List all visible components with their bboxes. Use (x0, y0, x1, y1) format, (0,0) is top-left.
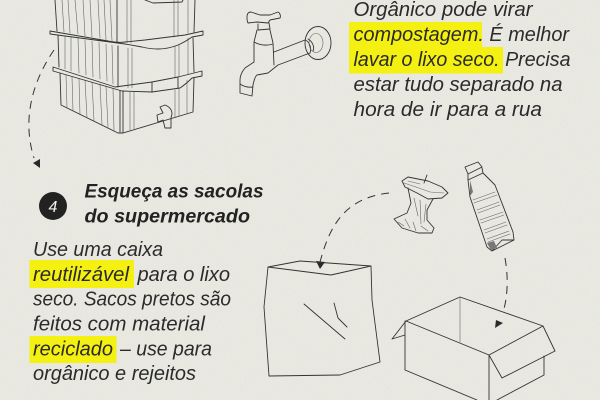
text block: organic and dry waste: estar tudo separado na (354, 74, 562, 96)
text block: organic and dry waste: compostagem. É melhor (354, 23, 570, 46)
icon: open cardboard box (392, 297, 555, 400)
text block: organic and dry waste: lavar o lixo seco. Precisa (354, 49, 570, 71)
icon: water tap (240, 12, 331, 96)
step number badge 4 (39, 192, 67, 220)
step number badge 4: 4 (49, 199, 58, 216)
highlight: reusable and recycled (30, 260, 134, 363)
text block: organic and dry waste (354, 0, 570, 121)
arrow: tank to step 4 (29, 50, 54, 168)
heading: step 4: Esqueça as sacolas (84, 182, 264, 202)
text block: step 4 body: reciclado (33, 338, 113, 360)
text block: step 4 body: orgânico e rejeitos (33, 363, 196, 385)
text block: step 4 body: – use para (119, 338, 212, 360)
text block: organic and dry waste: hora de ir para a rua (354, 99, 542, 121)
text block: step 4 body: para o lixo (136, 264, 230, 286)
heading: step 4 (84, 182, 264, 228)
arrow: bottle to box (495, 258, 507, 328)
text block: step 4 body: seco. Sacos pretos são (33, 288, 231, 310)
text block: step 4 body (33, 239, 231, 385)
highlight: composting text (349, 22, 503, 74)
arrow: apple core to bag (316, 193, 389, 269)
icon: stacked compost bins (50, 0, 203, 133)
text block: step 4 body: reutilizável (33, 264, 130, 286)
text block: step 4 body: Use uma caixa (33, 239, 163, 261)
icon: plastic bottle (465, 162, 514, 251)
icon: bin spigot (157, 105, 172, 128)
heading: step 4: do supermercado (84, 206, 250, 228)
text block: step 4 body: feitos com material (33, 314, 206, 336)
icon: plastic bag (264, 261, 380, 376)
icon: apple core (394, 175, 448, 233)
